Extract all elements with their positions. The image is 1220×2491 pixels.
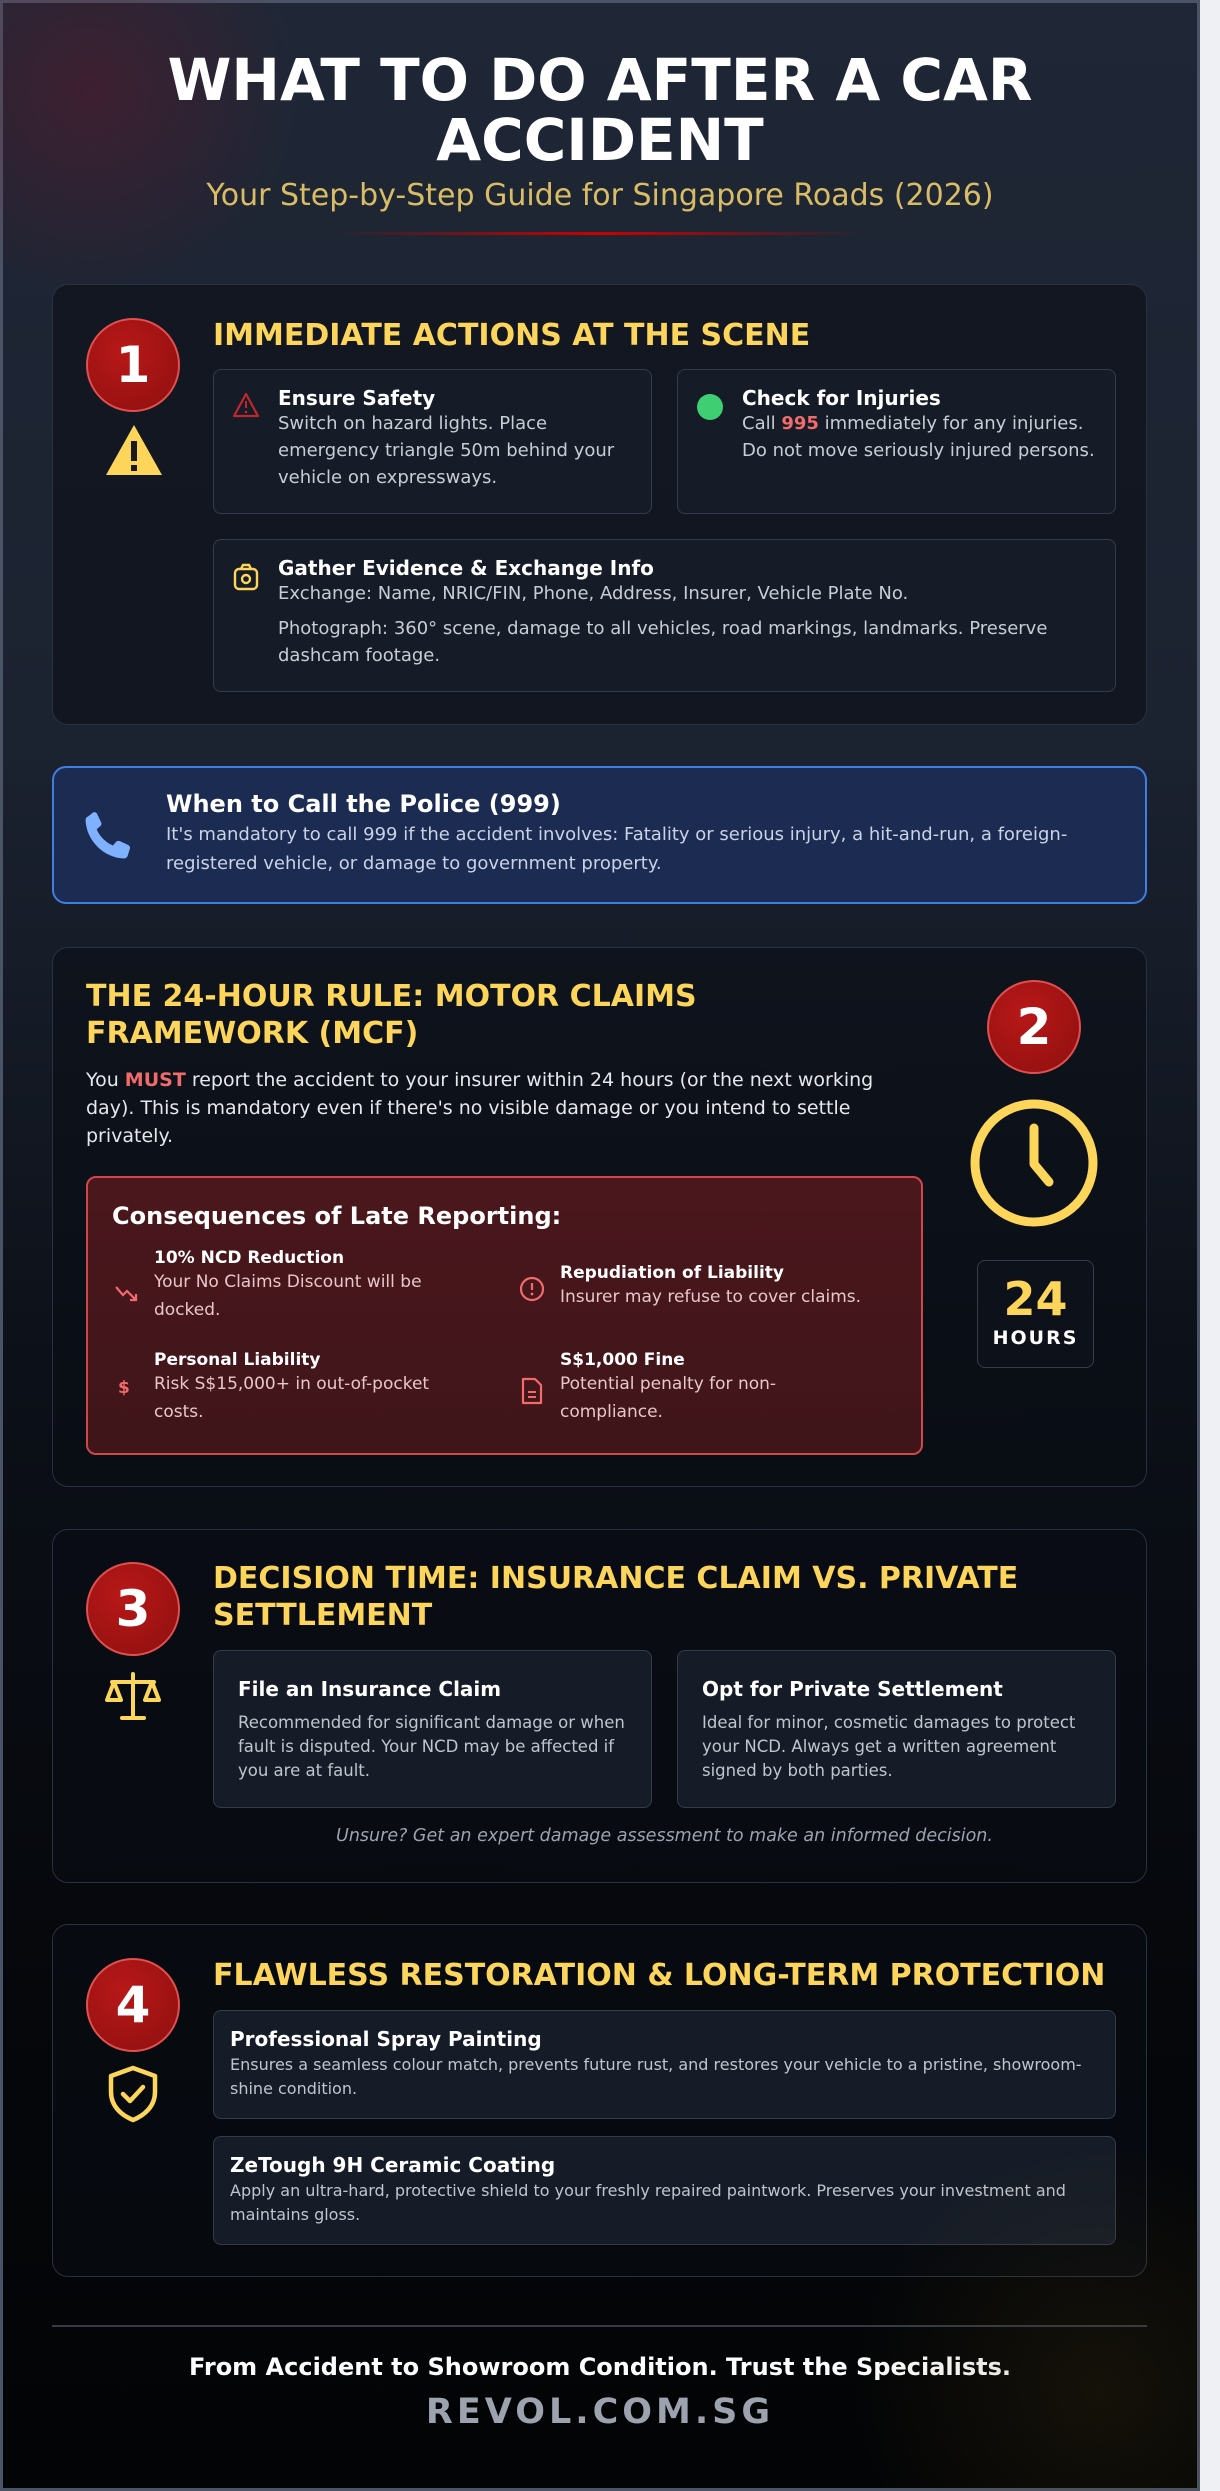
icon: clock xyxy=(970,1100,1098,1226)
24 hours badge: 24 xyxy=(1003,1272,1068,1326)
consequences box xyxy=(86,1176,923,1455)
step number 3 xyxy=(86,1562,180,1656)
card: gather evidence: Photograph: 360° scene, damage to all vehicles, road markings, landmarks. Preserve dashcam footage. xyxy=(278,618,1047,666)
consequences box: S$1,000 Fine xyxy=(560,1350,685,1370)
step number 3: 3 xyxy=(116,1580,150,1638)
title xyxy=(167,46,1033,174)
consequences box: 10% NCD Reduction xyxy=(154,1248,344,1268)
card: check injuries: Check for Injuries xyxy=(742,386,941,410)
24 hours badge xyxy=(977,1260,1094,1368)
card: spray painting xyxy=(213,2010,1116,2119)
subtitle: Your Step-by-Step Guide for Singapore Roads (2026) xyxy=(206,178,994,213)
item: repudiation xyxy=(520,1263,861,1307)
icon: scales xyxy=(104,1672,161,1720)
consequences box: Potential penalty for non-compliance. xyxy=(560,1374,776,1422)
card: ensure safety: Switch on hazard lights. Place emergency triangle 50m behind your vehicle on expressways. xyxy=(278,413,614,488)
step number 1: 1 xyxy=(116,336,150,394)
card: file claim: File an Insurance Claim xyxy=(238,1677,501,1701)
icon: warning triangle xyxy=(106,425,162,475)
consequences box: Personal Liability xyxy=(154,1350,320,1370)
card: check injuries xyxy=(677,369,1116,514)
text: must report: You MUST report the accident to your insurer within 24 hours (or the next working day). This is mandatory even if there's no visible damage or you intend to settle privately. xyxy=(86,1069,873,1147)
footer tagline: From Accident to Showroom Condition. Trust the Specialists. xyxy=(189,2353,1011,2381)
card: private settlement: Opt for Private Settlement xyxy=(702,1677,1003,1701)
step number 4 xyxy=(86,1958,180,2052)
title: WHAT TO DO AFTER A CAR xyxy=(167,46,1033,114)
consequences box: Insurer may refuse to cover claims. xyxy=(560,1287,861,1307)
step number 2 xyxy=(987,980,1081,1074)
panel: step 1 immediate actions xyxy=(52,284,1147,725)
card: file claim: Recommended for significant damage or when fault is disputed. Your NCD may be affected if you are at fault. xyxy=(238,1713,625,1780)
consequences box: $ xyxy=(118,1378,130,1398)
item: NCD xyxy=(115,1248,422,1320)
card: ceramic coating: Apply an ultra-hard, protective shield to your freshly repaired paintwork. Preserves your investment and maintains gloss. xyxy=(230,2181,1066,2224)
item: personal liability xyxy=(118,1350,429,1422)
card: private settlement: Ideal for minor, cosmetic damages to protect your NCD. Always get a written agreement signed by both parties. xyxy=(702,1713,1075,1780)
callout: police: When to Call the Police (999) xyxy=(166,790,561,818)
heading: IMMEDIATE ACTIONS AT THE SCENE xyxy=(213,318,810,353)
card: ensure safety: Ensure Safety xyxy=(278,386,435,410)
title: ACCIDENT xyxy=(436,106,764,174)
callout: police xyxy=(52,766,1147,904)
note: Unsure? Get an expert damage assessment to make an informed decision. xyxy=(336,1826,993,1846)
heading: DECISION TIME: INSURANCE CLAIM VS. PRIVATE SETTLEMENT xyxy=(213,1561,1018,1633)
card: check injuries: Call 995 immediately for any injuries. Do not move seriously injured persons. xyxy=(742,413,1095,461)
callout: police: It's mandatory to call 999 if the accident involves: Fatality or serious injury, a hit-and-run, a foreign-registered vehicle, or damage to government property. xyxy=(166,824,1067,874)
icon: phone xyxy=(86,812,130,858)
footer brand: REVOL.COM.SG xyxy=(426,2392,774,2432)
card: gather evidence: Gather Evidence & Exchange Info xyxy=(278,556,654,580)
24 hours badge: HOURS xyxy=(993,1327,1078,1349)
card: ceramic coating: ZeTough 9H Ceramic Coating xyxy=(230,2153,555,2177)
icon: shield xyxy=(108,2066,158,2122)
consequences box: Your No Claims Discount will be docked. xyxy=(154,1272,422,1320)
card: gather evidence xyxy=(213,539,1116,692)
step number 4: 4 xyxy=(116,1976,150,2034)
step number 1 xyxy=(86,318,180,412)
card: spray painting: Professional Spray Painting xyxy=(230,2027,542,2051)
card: spray painting: Ensures a seamless colour match, prevents future rust, and restores your vehicle to a pristine, showroom-shine condition. xyxy=(230,2055,1082,2098)
card: file claim xyxy=(213,1650,652,1808)
step number 2: 2 xyxy=(1017,998,1051,1056)
heading: THE 24-HOUR RULE: MOTOR CLAIMS FRAMEWORK (MCF) xyxy=(86,979,697,1051)
panel: step 3 decision xyxy=(52,1529,1147,1883)
heading: FLAWLESS RESTORATION & LONG-TERM PROTECTION xyxy=(213,1958,1105,1993)
card: ensure safety xyxy=(213,369,652,514)
panel: step 2 24-hour rule xyxy=(52,947,1147,1487)
card: gather evidence: Exchange: Name, NRIC/FIN, Phone, Address, Insurer, Vehicle Plate No. xyxy=(278,583,908,604)
card: private settlement xyxy=(677,1650,1116,1808)
consequences box: Risk S$15,000+ in out-of-pocket costs. xyxy=(154,1374,429,1422)
consequences box: Repudiation of Liability xyxy=(560,1263,784,1283)
card: ceramic coating xyxy=(213,2136,1116,2245)
panel: step 4 restoration xyxy=(52,1924,1147,2277)
consequences box: Consequences of Late Reporting: xyxy=(112,1202,561,1230)
item: fine xyxy=(522,1350,776,1422)
